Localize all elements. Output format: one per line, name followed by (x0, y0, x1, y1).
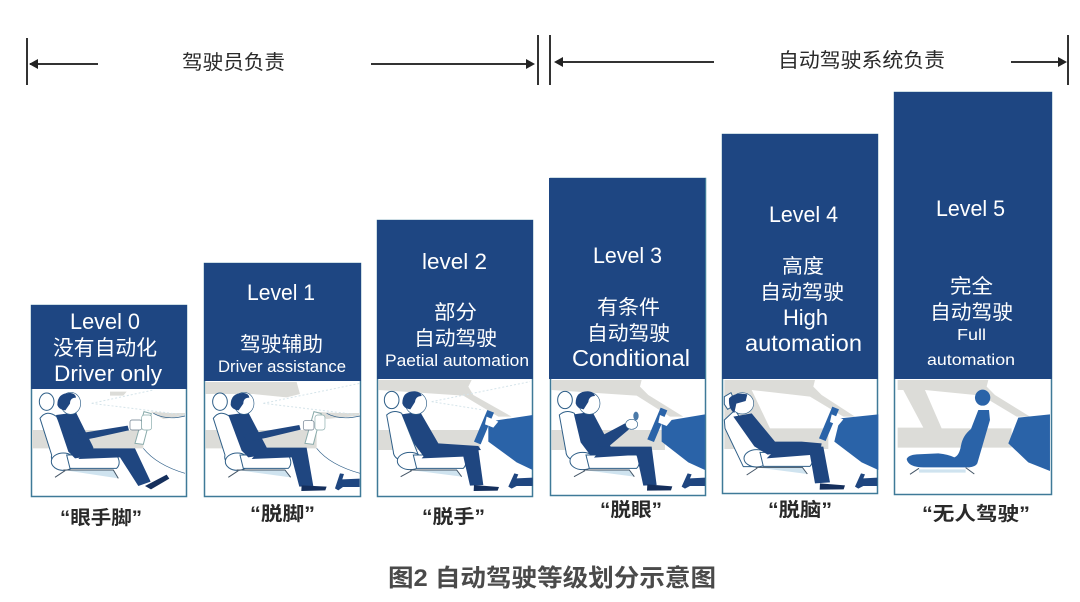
level 4 text: High (783, 305, 828, 330)
level 1 text: Level 1 (247, 280, 315, 305)
caption: feet off: “脱脚” (250, 503, 315, 525)
level 2 text (385, 249, 529, 370)
level 5 text (927, 196, 1015, 369)
level 4 text: automation (745, 330, 862, 356)
header: driver responsible: 驾驶员负责 (182, 51, 285, 74)
level 4 text: 自动驾驶 (760, 281, 844, 304)
header: automated system responsible (550, 35, 1068, 85)
level 5 text: 完全 (950, 275, 993, 298)
level 5 text: Level 5 (936, 196, 1005, 221)
caption: driverless: “无人驾驶” (922, 503, 1030, 525)
panel: Level 2 (377, 220, 533, 496)
level 1 text: 驾驶辅助 (240, 333, 323, 356)
panel: Level 5 (894, 92, 1052, 494)
caption: eyes hands feet: “眼手脚” (60, 507, 142, 529)
panel: Level 1 (204, 263, 361, 496)
illustration: driver with eyes off road (552, 380, 705, 491)
level 0 text: Level 0 (70, 309, 140, 334)
illustration: driver with hands and feet on controls (32, 390, 185, 489)
level 0 text (53, 309, 162, 386)
header: driver responsible (27, 35, 538, 85)
level 2 text: 自动驾驶 (414, 327, 497, 350)
panel: Level 4 (722, 134, 878, 494)
level 4 text: 高度 (782, 255, 824, 278)
level 4 text: Level 4 (769, 202, 838, 227)
header: automated system responsible: 自动驾驶系统负责 (778, 49, 945, 72)
level 5 text: automation (927, 352, 1015, 369)
level 5 text: Full (957, 327, 986, 344)
level 0 text: Driver only (54, 361, 162, 386)
figure title: 图2 自动驾驶等级划分示意图 (388, 564, 716, 592)
caption: eyes off: “脱眼” (600, 499, 662, 521)
level 2 text: level 2 (422, 249, 487, 274)
caption: hands off: “脱手” (422, 506, 485, 528)
level 3 text: Conditional (572, 345, 690, 371)
panel: Level 0 (31, 305, 187, 496)
panel: Level 3 (549, 178, 706, 496)
illustration: driver with feet off pedals (205, 382, 360, 491)
level 1 text (218, 280, 346, 376)
level 1 text: Driver assistance (218, 357, 346, 376)
caption: mind off: “脱脑” (768, 499, 832, 521)
level 2 text: 部分 (434, 301, 477, 324)
level 5 text: 自动驾驶 (930, 301, 1013, 324)
level 0 text: 没有自动化 (53, 337, 157, 360)
level 3 text: 有条件 (597, 296, 660, 319)
illustration: reclined driver with mind off driving (724, 380, 878, 490)
level 4 text (745, 202, 862, 356)
level 3 text: Level 3 (593, 243, 662, 268)
level 2 text: Paetial automation (385, 351, 529, 370)
level 3 text: 自动驾驶 (587, 322, 670, 345)
illustration: driver with hands off wheel (378, 380, 533, 491)
level 3 text (572, 243, 690, 371)
illustration: empty driver seat (898, 380, 1050, 474)
